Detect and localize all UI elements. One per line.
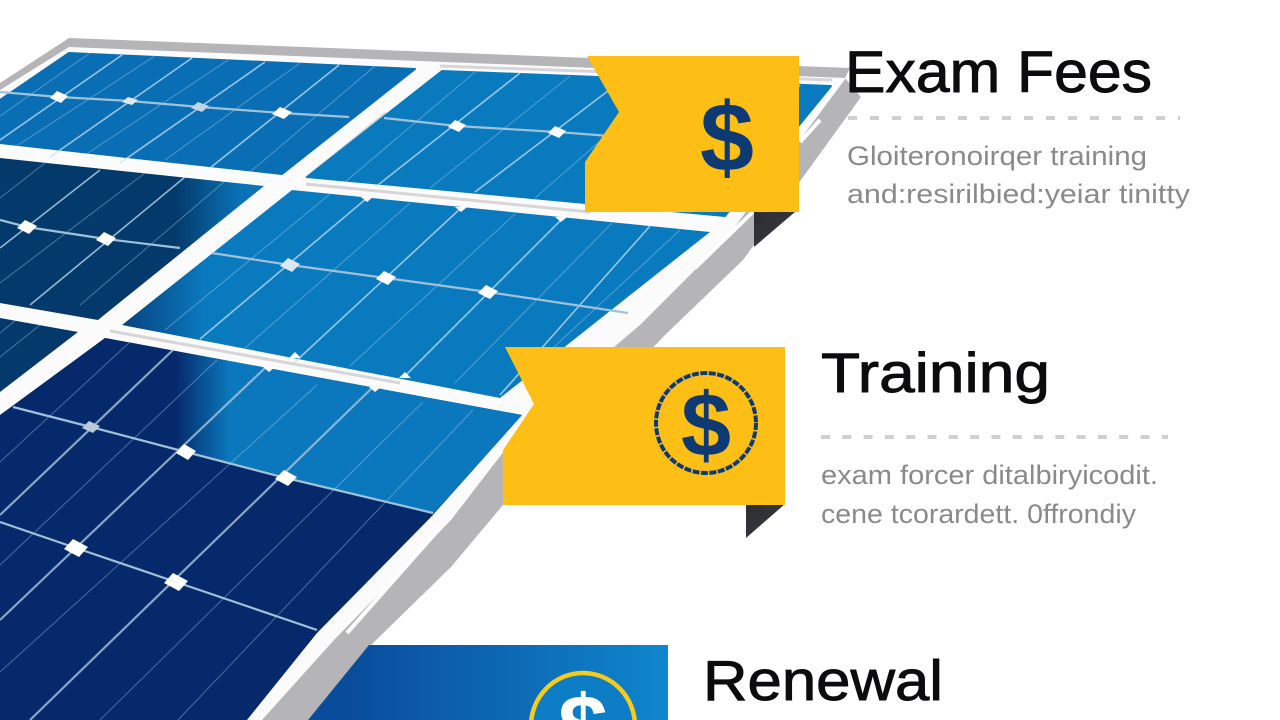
cell row lines (0, 92, 628, 630)
description (847, 141, 1191, 209)
cell junction diamonds (17, 91, 567, 591)
description: Gloiteronoirqer training (847, 141, 1147, 171)
panel white inner frame (0, 47, 846, 720)
thin cell lines (0, 53, 760, 720)
yellow ribbon (585, 56, 799, 212)
heading: Renewal (703, 649, 943, 713)
description: and:resirilbied:yeiar tinitty (847, 179, 1191, 209)
module small left (0, 318, 78, 392)
text block: exam fees (845, 40, 1191, 209)
description: exam forcer ditalbiryicodit. (821, 460, 1158, 490)
banner: exam fees (585, 56, 799, 247)
icon: dollar coin (656, 373, 756, 476)
banner fold (754, 212, 795, 247)
module bottom navy (0, 338, 522, 720)
module top-right (307, 71, 831, 216)
banner fold (746, 504, 785, 538)
yellow ribbon (503, 347, 785, 505)
heading: Exam Fees (845, 40, 1152, 105)
text block: training (821, 341, 1168, 529)
banner: renewal (308, 645, 668, 720)
mullion shading (110, 66, 832, 383)
description: cene tcorardett. 0ffrondiy (821, 499, 1137, 529)
frame highlight stripes (347, 120, 820, 633)
solar panel illustration (0, 38, 861, 720)
module top-left (0, 53, 415, 174)
blue ribbon (308, 645, 668, 720)
module bottom upper row (13, 338, 522, 514)
heading: Training (821, 341, 1050, 404)
icon: dollar coin (531, 673, 635, 720)
module middle-left dark (0, 158, 264, 320)
module centre (122, 190, 710, 398)
icon: dollar sign: $ (700, 83, 754, 192)
icon: dollar coin: $ (681, 376, 731, 476)
cell major lines lower module (0, 350, 373, 720)
major cell column lines (0, 55, 800, 395)
description (821, 460, 1158, 529)
panel silver outer frame (0, 38, 861, 720)
banner: training (503, 347, 785, 538)
